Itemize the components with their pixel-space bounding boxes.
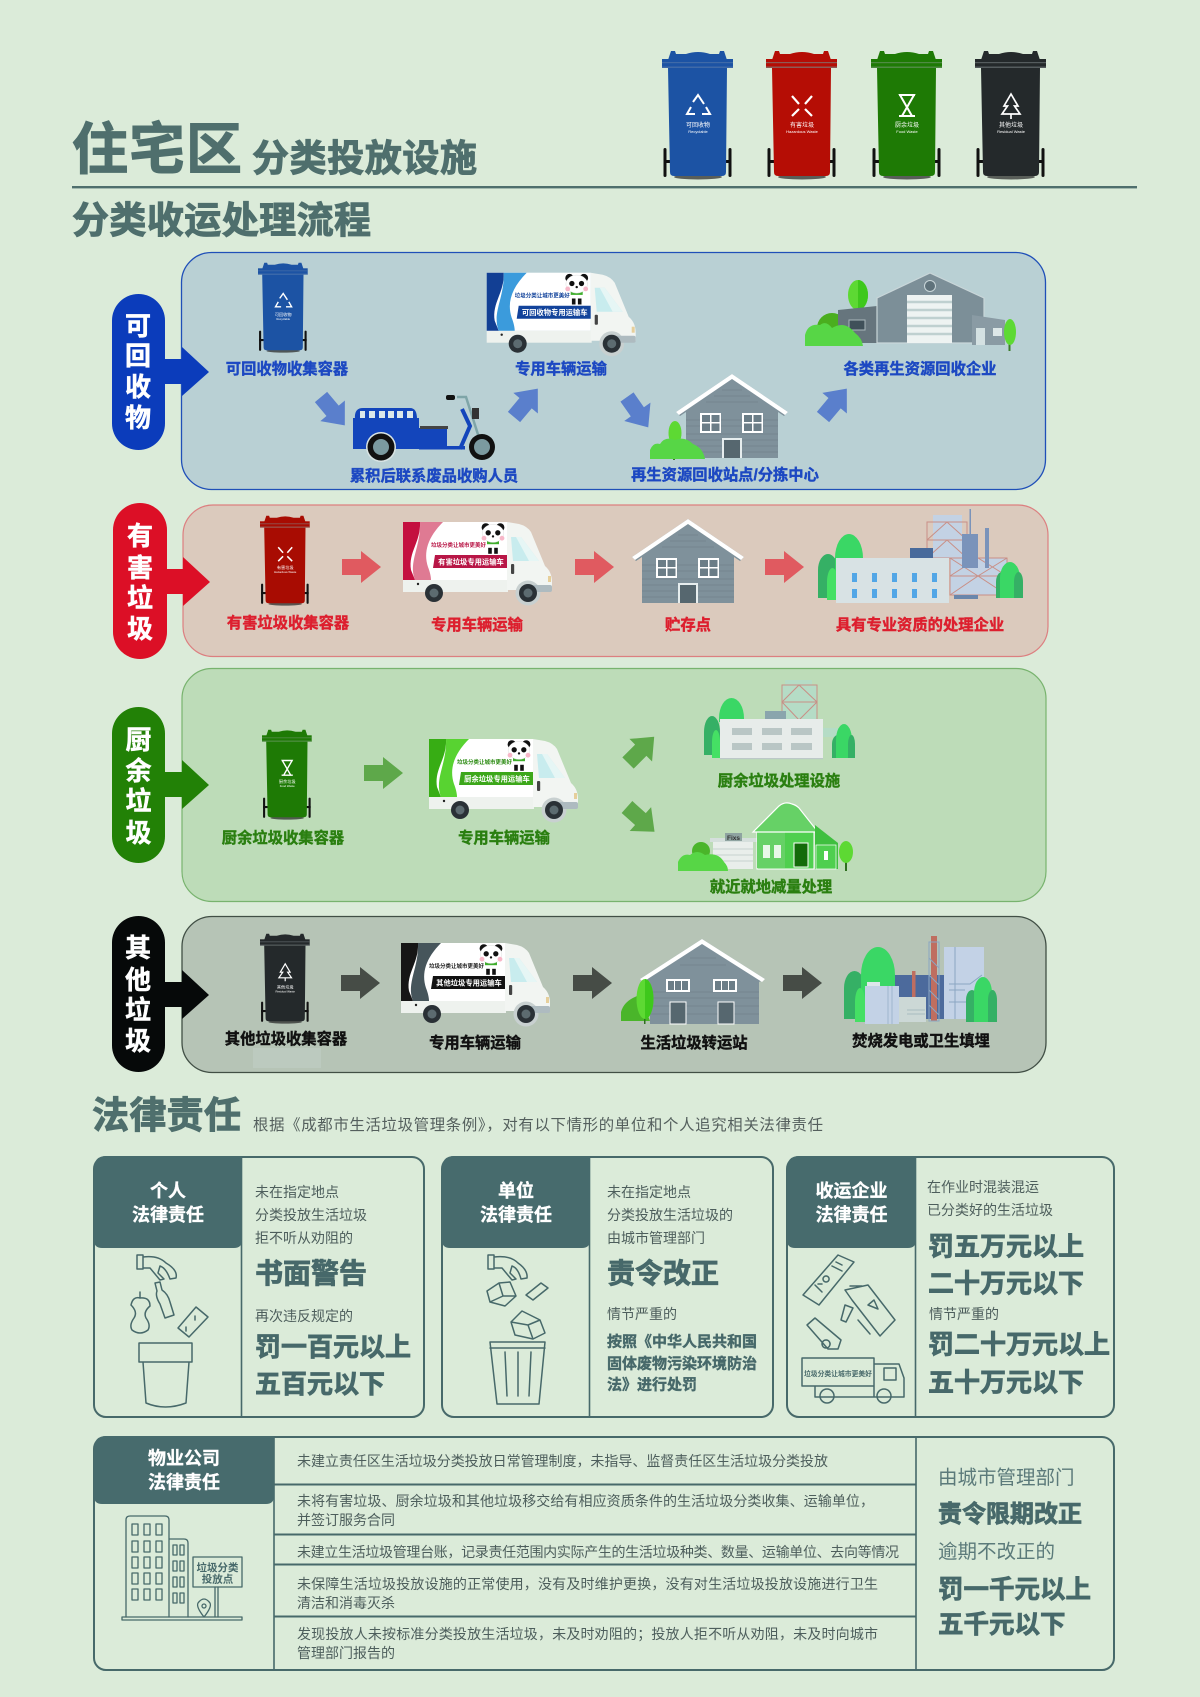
pill: hazardous: 害 (127, 553, 153, 583)
icon: hand dropping waste into cup (131, 1255, 208, 1407)
heading: legal responsibility: 根据《成都市生活垃圾管理条例》，对有以下情形的单位和个人追究相关法律责任 (253, 1116, 823, 1134)
text: property violations: 并签订服务合同 (297, 1512, 395, 1528)
text: individual: 未在指定地点 (255, 1184, 339, 1200)
text: property penalties (938, 1467, 1091, 1639)
header: property company: 物业公司 (148, 1448, 220, 1468)
icon: small green bin: Food Waste (280, 784, 295, 788)
text: property penalties: 罚一千元以上 (938, 1576, 1091, 1604)
pill: residual: 圾 (125, 1026, 151, 1056)
icon: blue van: 可回收物专用运输车 (522, 308, 588, 317)
icon: red hazardous bin: 有害垃圾 (790, 121, 814, 129)
text: transport company: 情节严重的 (929, 1306, 999, 1322)
pill: recyclable: 物 (125, 403, 151, 433)
icon: green house (678, 803, 853, 871)
icon: blue recyclable bin (662, 51, 733, 180)
icon: building with sign (122, 1516, 242, 1620)
label: 可回收物收集容器 (226, 360, 349, 378)
panel: organization (442, 1156, 773, 1417)
text: individual: 分类投放生活垃圾 (255, 1207, 367, 1223)
icon: storage house (632, 519, 744, 603)
text: organization: 按照《中华人民共和国 (607, 1332, 757, 1350)
arrow (342, 551, 381, 583)
label: 就近就地减量处理 (710, 878, 832, 896)
icon: small blue bin: 可回收物 (275, 311, 292, 318)
heading: process: 分类收运处理流程 (72, 200, 371, 241)
label: 焚烧发电或卫生填埋 (852, 1032, 990, 1050)
icon: black van: 垃圾分类让城市更美好 (429, 962, 485, 970)
icon: red hazardous bin: Hazardous Waste (786, 129, 819, 134)
text: individual: 书面警告 (255, 1258, 367, 1289)
arrow (783, 967, 822, 999)
text: property penalties: 责令限期改正 (938, 1501, 1082, 1528)
text: transport company: 在作业时混装混运 (927, 1179, 1039, 1195)
icon: small blue bin (258, 263, 308, 353)
arrow (573, 967, 612, 999)
text: organization: 固体废物污染环境防治 (607, 1354, 757, 1372)
text: individual: 拒不听从劝阻的 (255, 1230, 353, 1246)
label: 厨余垃圾处理设施 (718, 772, 840, 790)
label: 其他垃圾收集容器 (225, 1030, 348, 1048)
text: property violations: 清洁和消毒灭杀 (297, 1595, 395, 1611)
panel: kitchen waste (112, 668, 1046, 902)
label: 专用车辆运输 (429, 1034, 522, 1052)
icon: red hazardous bin (766, 51, 837, 180)
arrow (811, 378, 859, 427)
icon: red van: 垃圾分类让城市更美好 (431, 541, 487, 549)
icon: black residual bin: 其他垃圾 (999, 121, 1023, 129)
text: property penalties: 由城市管理部门 (938, 1467, 1075, 1489)
icon: small black bin (260, 934, 310, 1024)
icon: small black bin: Residual Waste (275, 989, 295, 993)
pill: residual: 其 (125, 933, 151, 963)
header: transport company (787, 1156, 916, 1248)
header: transport company: 收运企业 (816, 1180, 888, 1201)
header: organization: 法律责任 (480, 1205, 552, 1225)
pill: residual: 垃 (125, 995, 151, 1025)
icon: recycling station house (650, 374, 788, 460)
arrow (364, 757, 403, 789)
icon: waste items and truck (802, 1255, 904, 1403)
text: property violations: 未建立责任区生活垃圾分类投放日常管理制度，未指导、监督责任区生活垃圾分类投放 (297, 1453, 828, 1469)
icon: red van (403, 522, 552, 606)
text: transport company: 五十万元以下 (928, 1368, 1084, 1398)
text: property penalties: 逾期不改正的 (938, 1541, 1055, 1563)
text: transport company (927, 1179, 1110, 1398)
text: organization: 责令改正 (607, 1258, 719, 1289)
arrow (617, 725, 666, 774)
pill: residual: 他 (125, 965, 151, 995)
arrow (341, 967, 380, 999)
icon: green food waste bin (871, 51, 942, 180)
pill: recyclable: 收 (125, 372, 151, 402)
header: property company (94, 1436, 274, 1504)
icon: green food waste bin: 厨余垃圾 (895, 121, 919, 129)
label: 具有专业资质的处理企业 (836, 616, 1004, 634)
label: 生活垃圾转运站 (640, 1034, 748, 1052)
icon: black van: 其他垃圾专用运输车 (436, 978, 502, 988)
pill: kitchen waste: 垃 (125, 786, 152, 816)
text: transport company: 罚五万元以上 (928, 1232, 1084, 1262)
text: organization: 由城市管理部门 (607, 1230, 705, 1246)
heading: legal responsibility: 法律责任 (92, 1095, 241, 1136)
pill: kitchen waste: 圾 (125, 818, 152, 848)
icon: building with sign: 垃圾分类 (196, 1561, 239, 1574)
text: property violations: 未保障生活垃圾投放设施的正常使用，没有及时维护更换，没有对生活垃圾投放设施进行卫生 (297, 1576, 878, 1592)
icon: green house: Fixs (727, 835, 740, 842)
header: individual: 个人 (150, 1181, 186, 1201)
label: 再生资源回收站点/分拣中心 (631, 466, 819, 484)
icon: hazardous treatment plant (818, 509, 1023, 603)
icon: red van: 有害垃圾专用运输车 (438, 558, 504, 566)
title: 住宅区 (72, 118, 242, 181)
pill: hazardous: 有 (127, 521, 153, 551)
pill: recyclable (112, 294, 209, 450)
arrow (502, 378, 550, 427)
pill: hazardous: 圾 (127, 614, 153, 644)
text: organization: 分类投放生活垃圾的 (607, 1207, 733, 1223)
text: individual: 五百元以下 (255, 1369, 385, 1399)
text: organization: 法》进行处罚 (607, 1376, 697, 1394)
icon: small green bin (262, 730, 312, 820)
text: individual: 罚一百元以上 (255, 1332, 411, 1362)
heading: legal responsibility (92, 1095, 823, 1136)
icon: green van (429, 739, 578, 822)
text: transport company: 已分类好的生活垃圾 (927, 1202, 1053, 1218)
icon: blue van: 垃圾分类让城市更美好 (515, 292, 570, 300)
label: 专用车辆运输 (431, 616, 524, 634)
icon: kitchen waste facility (704, 680, 855, 759)
header: individual: 法律责任 (132, 1205, 204, 1225)
icon: small red bin (260, 516, 310, 606)
text: transport company: 二十万元以下 (928, 1268, 1084, 1298)
panel: hazardous (113, 503, 1048, 659)
text: property penalties: 五千元以下 (938, 1611, 1066, 1639)
text: property violations: 未将有害垃圾、厨余垃圾和其他垃圾移交给有相应资质条件的生活垃圾分类收集、运输单位， (297, 1493, 874, 1509)
pill: recyclable: 可 (125, 311, 151, 341)
icon: small blue bin: Recyclable (276, 317, 290, 321)
icon: black residual bin (975, 51, 1046, 180)
icon: blue van (487, 273, 636, 356)
label: 专用车辆运输 (458, 829, 551, 847)
header: property company: 法律责任 (148, 1472, 220, 1492)
text: transport company: 罚二十万元以上 (928, 1330, 1110, 1360)
icon: tricycle (353, 395, 495, 462)
icon: incineration plant (844, 936, 997, 1024)
pill: residual (112, 916, 209, 1072)
icon: hand dropping waste into bin (487, 1255, 548, 1404)
text: property violations: 发现投放人未按标准分类投放生活垃圾，未及时劝阻的；投放人拒不听从劝阻，未及时向城市 (297, 1626, 878, 1643)
label: 贮存点 (665, 616, 711, 634)
arrow (614, 388, 661, 437)
icon text: truck slogan: 垃圾分类让城市更美好 (804, 1369, 872, 1378)
label: 各类再生资源回收企业 (844, 360, 996, 378)
text: individual: 再次违反规定的 (255, 1308, 353, 1324)
arrow (616, 795, 665, 844)
label: 专用车辆运输 (515, 360, 608, 378)
header: organization (442, 1156, 590, 1248)
arrow (575, 551, 614, 583)
panel: transport company (787, 1156, 1114, 1417)
icon: small red bin: Hazardous Waste (274, 570, 297, 574)
panel: property company (94, 1436, 1114, 1670)
icon: green van: 垃圾分类让城市更美好 (457, 758, 513, 766)
pill: kitchen waste (112, 707, 209, 863)
text: property violations: 管理部门报告的 (297, 1645, 395, 1661)
text: organization: 未在指定地点 (607, 1184, 691, 1200)
header: organization: 单位 (498, 1180, 534, 1201)
panel: residual waste (112, 916, 1046, 1072)
pill: kitchen waste: 余 (125, 756, 152, 786)
icon: black van (401, 943, 550, 1026)
icon: small green bin: 厨余垃圾 (279, 778, 296, 785)
text: organization: 情节严重的 (607, 1306, 677, 1322)
arrow (309, 387, 357, 436)
label: 累积后联系废品收购人员 (350, 467, 518, 485)
label: 厨余垃圾收集容器 (222, 829, 345, 847)
icon: small red bin: 有害垃圾 (277, 564, 294, 571)
header: transport company: 法律责任 (816, 1205, 888, 1225)
title: 分类投放设施 (252, 138, 477, 179)
panel: individual (94, 1156, 424, 1417)
icon: black residual bin: Residual Waste (997, 129, 1026, 134)
panel: recyclable (112, 252, 1046, 490)
icon: green food waste bin: Food Waste (896, 129, 918, 134)
title (72, 118, 477, 181)
arrow (765, 551, 804, 583)
header: individual (94, 1156, 242, 1248)
icon: warehouse (805, 273, 1016, 351)
icon: blue recyclable bin: 可回收物 (686, 121, 710, 129)
icon: transfer station (621, 939, 765, 1024)
icon: green van: 厨余垃圾专用运输车 (464, 774, 530, 784)
text: property violations: 未建立生活垃圾管理台账，记录责任范围内实际产生的生活垃圾种类、数量、运输单位、去向等情况 (297, 1544, 899, 1560)
icon: small black bin: 其他垃圾 (277, 983, 294, 990)
icon: building with sign: 投放点 (202, 1572, 234, 1586)
label: 有害垃圾收集容器 (227, 614, 350, 632)
pill: recyclable: 回 (125, 341, 151, 371)
text: individual (255, 1184, 411, 1399)
text: property violations (297, 1453, 899, 1661)
pill: hazardous (113, 503, 210, 659)
icon: blue recyclable bin: Recyclable (688, 129, 709, 134)
pill: hazardous: 垃 (127, 583, 153, 613)
text: organization (607, 1184, 757, 1394)
pill: kitchen waste: 厨 (125, 725, 152, 755)
